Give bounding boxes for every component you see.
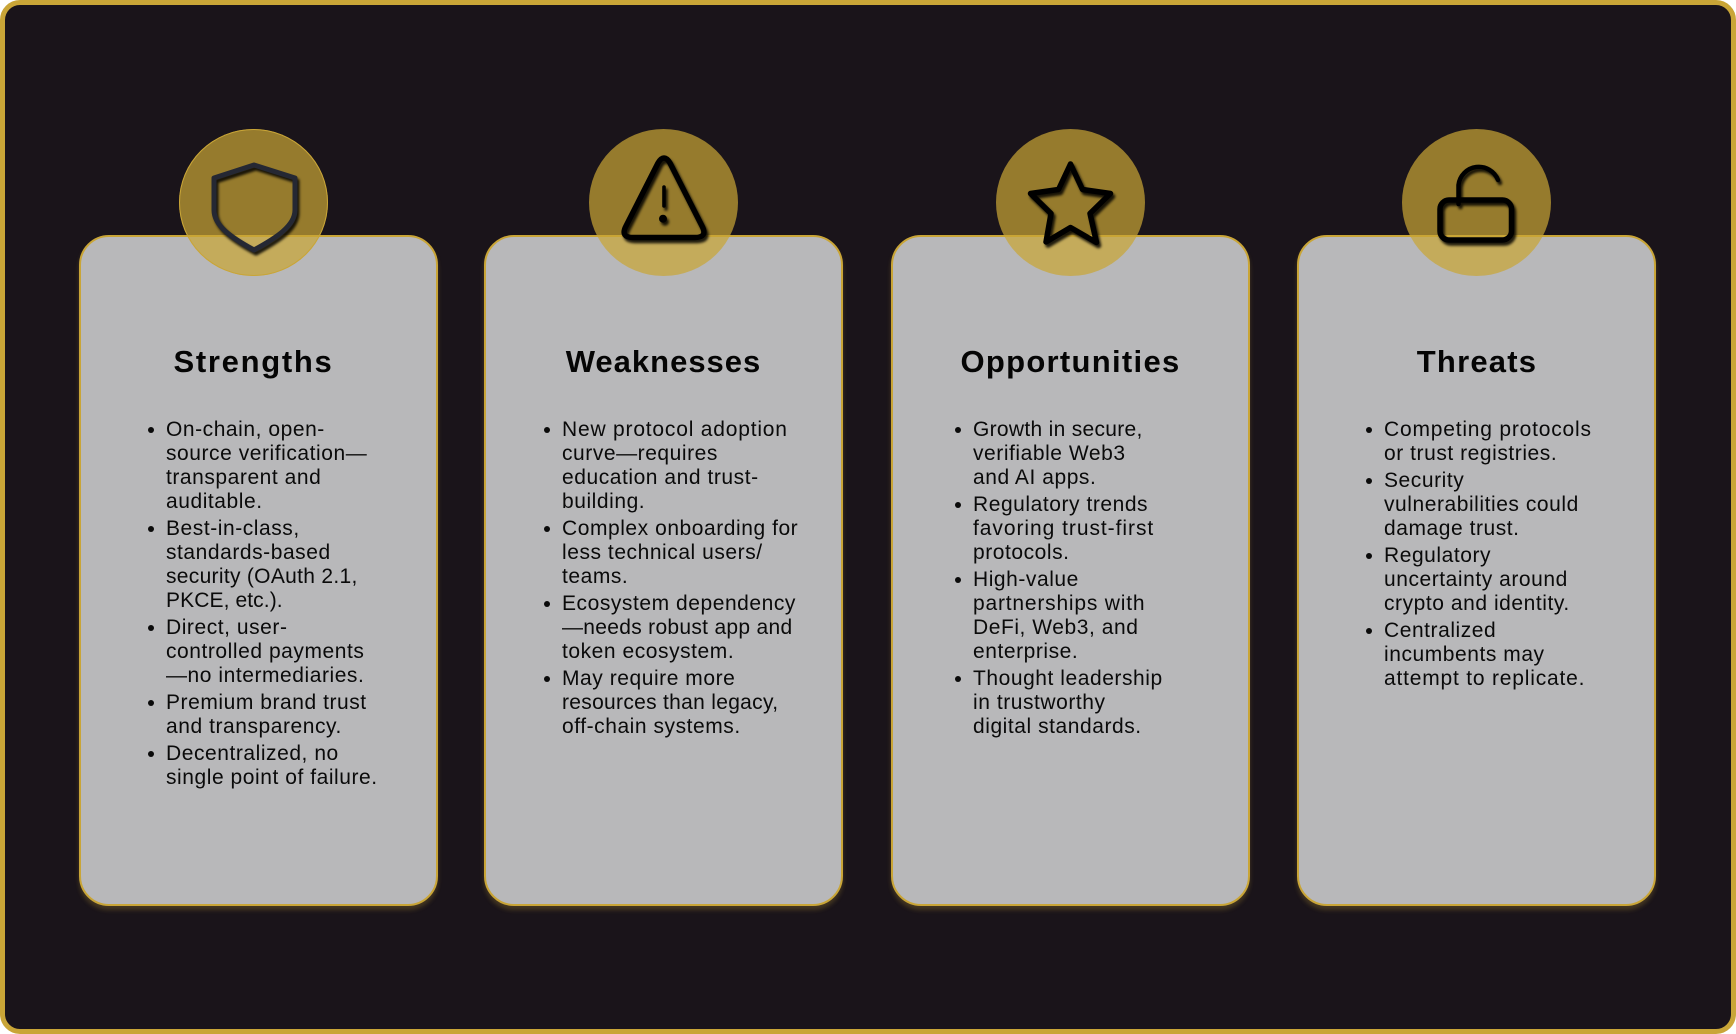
list: threats: crypto and identity.: [1384, 592, 1570, 615]
list: opportunities: Growth in secure,: [973, 418, 1143, 441]
panel: strengths: [77, 129, 440, 912]
list: strengths: source verification—: [166, 442, 367, 465]
list: weaknesses: Ecosystem dependency: [562, 592, 796, 615]
card: threats: [1297, 235, 1656, 906]
list: opportunities: verifiable Web3: [973, 442, 1126, 465]
list: weaknesses: off-chain systems.: [562, 715, 741, 738]
list: strengths: On-chain, open-: [166, 418, 325, 441]
icon: shield: [212, 162, 302, 258]
list: threats: uncertainty around: [1384, 568, 1568, 591]
list: weaknesses: building.: [562, 490, 645, 513]
list: strengths: Decentralized, no: [166, 742, 339, 765]
list: strengths: [148, 418, 378, 789]
list: opportunities: Thought leadership: [973, 667, 1163, 690]
card: opportunities: [891, 235, 1250, 906]
list: opportunities: Regulatory trends: [973, 493, 1148, 516]
icon circle: weaknesses: [589, 129, 738, 276]
list: threats: attempt to replicate.: [1384, 667, 1585, 690]
icon circle: threats: [1402, 129, 1551, 276]
list: weaknesses: resources than legacy,: [562, 691, 778, 714]
icon: star: [1028, 161, 1117, 250]
list: threats: Centralized: [1384, 619, 1496, 642]
list: weaknesses: Complex onboarding for: [562, 517, 798, 540]
list: opportunities: DeFi, Web3, and: [973, 616, 1138, 639]
list: opportunities: enterprise.: [973, 640, 1078, 663]
list: opportunities: in trustworthy: [973, 691, 1106, 714]
panel: opportunities: [889, 129, 1252, 912]
icon: warning triangle: [621, 155, 710, 246]
icon circle: opportunities: [996, 129, 1145, 276]
list: threats: Regulatory: [1384, 544, 1491, 567]
heading: opportunities: Opportunities: [960, 344, 1181, 379]
list: threats: vulnerabilities could: [1384, 493, 1579, 516]
list: strengths: auditable.: [166, 490, 263, 513]
card: strengths: [79, 235, 438, 906]
list: weaknesses: token ecosystem.: [562, 640, 734, 663]
heading: weaknesses: Weaknesses: [566, 344, 761, 379]
list: strengths: standards-based: [166, 541, 331, 564]
icon: open padlock: [1437, 164, 1518, 248]
list: weaknesses: New protocol adoption: [562, 418, 788, 441]
list: threats: incumbents may: [1384, 643, 1545, 666]
list: threats: damage trust.: [1384, 517, 1520, 540]
list: weaknesses: education and trust-: [562, 466, 759, 489]
list: opportunities: [955, 418, 1163, 738]
list: strengths: controlled payments: [166, 640, 364, 663]
list: strengths: and transparency.: [166, 715, 342, 738]
list: opportunities: and AI apps.: [973, 466, 1096, 489]
heading: threats: Threats: [1417, 344, 1537, 379]
list: opportunities: favoring trust-first: [973, 517, 1154, 540]
list: weaknesses: [544, 418, 798, 738]
list: strengths: single point of failure.: [166, 766, 378, 789]
list: strengths: security (OAuth 2.1,: [166, 565, 358, 588]
list: threats: Security: [1384, 469, 1464, 492]
list: strengths: Premium brand trust: [166, 691, 367, 714]
heading: strengths: Strengths: [174, 344, 333, 379]
list: strengths: Direct, user-: [166, 616, 288, 639]
list: weaknesses: teams.: [562, 565, 628, 588]
list: weaknesses: May require more: [562, 667, 735, 690]
list: opportunities: protocols.: [973, 541, 1070, 564]
list: threats: [1366, 418, 1592, 690]
list: strengths: Best-in-class,: [166, 517, 300, 540]
list: opportunities: High-value: [973, 568, 1079, 591]
card: weaknesses: [484, 235, 843, 906]
list: strengths: transparent and: [166, 466, 321, 489]
list: opportunities: digital standards.: [973, 715, 1142, 738]
panel: weaknesses: [482, 129, 845, 912]
list: threats: Competing protocols: [1384, 418, 1592, 441]
list: opportunities: partnerships with: [973, 592, 1145, 615]
list: threats: or trust registries.: [1384, 442, 1557, 465]
list: weaknesses: curve—requires: [562, 442, 718, 465]
icon circle: strengths: [179, 129, 328, 276]
list: weaknesses: —needs robust app and: [562, 616, 792, 639]
list: strengths: —no intermediaries.: [166, 664, 364, 687]
panel: threats: [1295, 129, 1658, 912]
list: weaknesses: less technical users/: [562, 541, 763, 564]
list: strengths: PKCE, etc.).: [166, 589, 283, 612]
